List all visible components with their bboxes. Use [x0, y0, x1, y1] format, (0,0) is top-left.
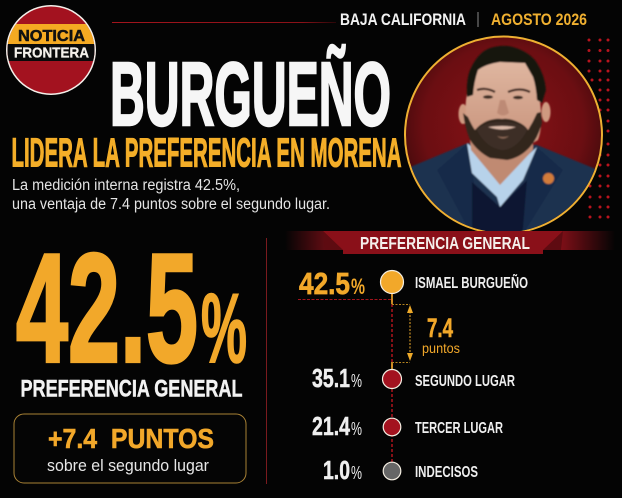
description text — [12, 177, 330, 213]
sweater — [472, 181, 527, 231]
row: Segundo lugar: % — [351, 371, 362, 391]
callout: +7.4 puntos — [14, 414, 246, 483]
description text: La medición interna registra 42.5%, — [12, 177, 240, 194]
row: Tercer lugar: TERCER LUGAR — [415, 420, 503, 437]
banner: Preferencia general — [285, 231, 615, 254]
gap value: puntos — [422, 340, 460, 356]
logo: Noticia Frontera — [6, 5, 96, 95]
row: Tercer lugar: 21.4 — [312, 411, 350, 441]
row: Indecisos — [323, 455, 478, 485]
gap arrow — [407, 305, 413, 361]
ears — [458, 104, 468, 124]
row: Ismael Burgueño: ISMAEL BURGUEÑO — [415, 274, 528, 292]
face — [464, 60, 542, 144]
chin patch — [497, 136, 509, 138]
hair — [467, 46, 546, 103]
title: Burgueño: BURGUEÑO — [110, 44, 391, 145]
row: Ismael Burgueño: % — [351, 274, 365, 299]
chart: preference ladder — [298, 266, 528, 485]
header: place and date: AGOSTO 2026 — [491, 11, 587, 29]
portrait photo — [400, 36, 612, 240]
big number label: PREFERENCIA GENERAL — [20, 376, 243, 402]
row: Ismael Burgueño: 42.5 — [299, 266, 350, 301]
row: Indecisos: 1.0 — [323, 455, 350, 485]
row: Segundo lugar: SEGUNDO LUGAR — [415, 373, 515, 390]
jacket — [411, 142, 596, 230]
row: Tercer lugar: % — [351, 419, 362, 439]
row: Tercer lugar — [312, 411, 503, 441]
brows — [477, 89, 530, 92]
neck — [470, 140, 533, 185]
big number: % — [201, 273, 247, 383]
header: place and date — [340, 11, 587, 29]
row: Segundo lugar — [312, 363, 515, 393]
eyes — [483, 95, 493, 99]
pin — [543, 173, 554, 184]
gap bracket — [392, 304, 410, 362]
gap value: 7.4 — [427, 313, 453, 343]
row: Indecisos: INDECISOS — [415, 464, 478, 481]
row: Ismael Burgueño — [299, 266, 528, 301]
top rule — [112, 22, 336, 23]
mouth — [488, 126, 516, 130]
connector line — [391, 294, 393, 470]
callout: +7.4 puntos: sobre el segundo lugar — [47, 456, 209, 475]
dotted decoration — [588, 38, 610, 218]
beard fill around mouth — [477, 122, 527, 150]
row: Segundo lugar: 35.1 — [312, 363, 350, 393]
banner: Preferencia general: PREFERENCIA GENERAL — [360, 233, 530, 253]
row: Indecisos: % — [351, 463, 362, 483]
lapel shading — [472, 183, 474, 227]
nose shadow — [497, 100, 509, 116]
logo: Noticia Frontera: FRONTERA — [14, 44, 89, 62]
callout: +7.4 puntos: +7.4 PUNTOS — [48, 423, 214, 454]
vertical divider — [266, 238, 267, 484]
gap value — [422, 313, 460, 356]
header: place and date: BAJA CALIFORNIA — [340, 11, 466, 29]
logo: Noticia Frontera: NOTICIA — [18, 28, 85, 45]
shirt — [467, 143, 537, 207]
beard — [463, 112, 542, 160]
leader line — [298, 298, 392, 300]
description text: una ventaja de 7.4 puntos sobre el segundo lugar. — [12, 196, 330, 213]
big number: 42.5 — [16, 222, 198, 394]
gold connector ends — [391, 294, 393, 370]
